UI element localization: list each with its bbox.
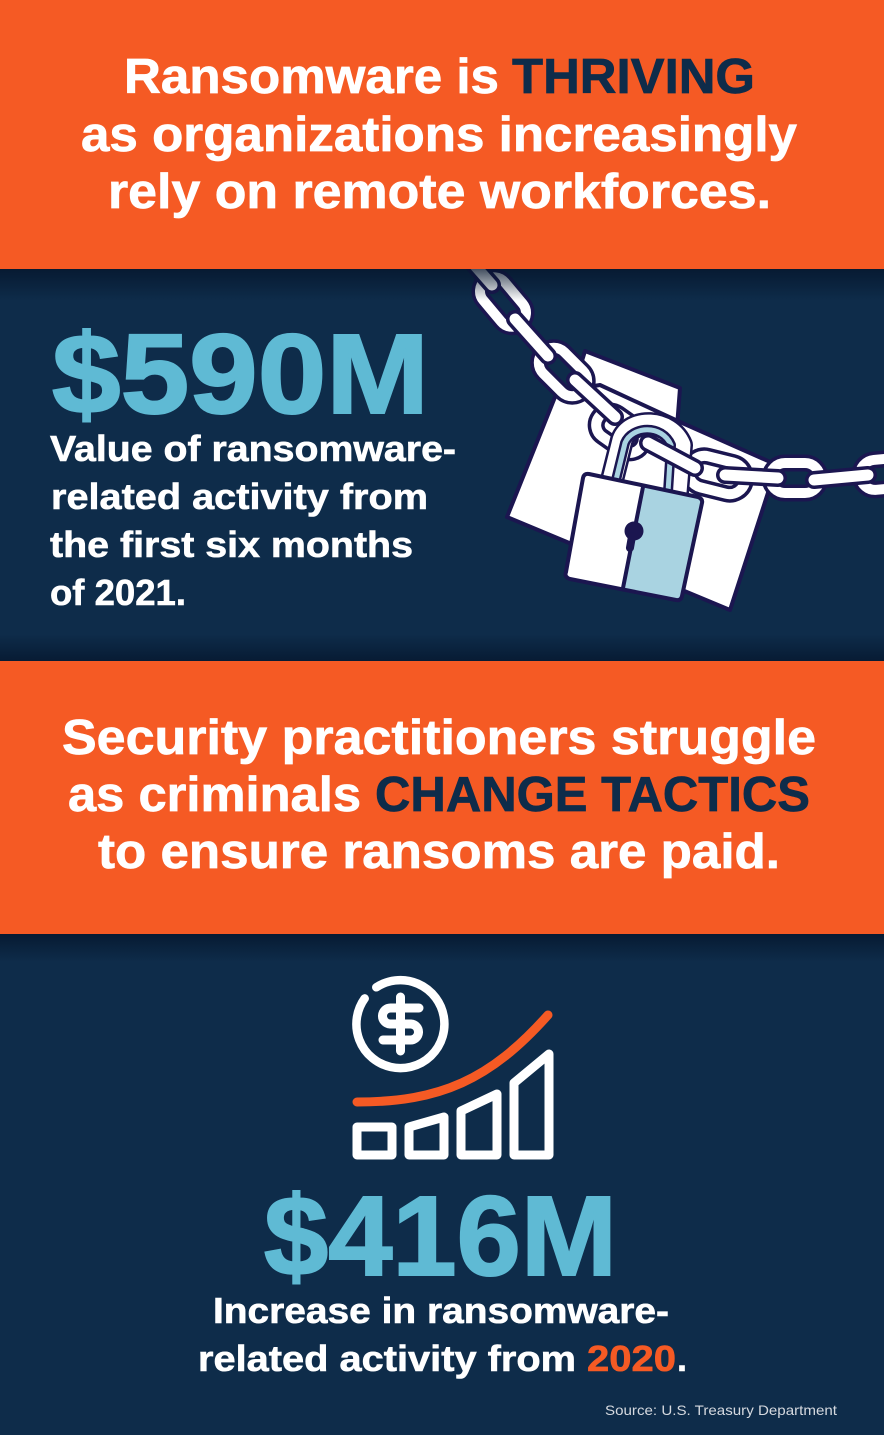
panel: $416M stat [0,934,884,1435]
chain bars [470,260,868,480]
text block: increase from 2020: related activity from [198,1338,576,1379]
text block: value of ransomware activity: of 2021. [50,572,186,613]
bars [357,1054,549,1155]
panel: $590M stat [0,260,884,661]
chain rings [474,272,884,498]
heading: security practitioners struggle: Security practitioners struggle [62,711,816,765]
text block: increase from 2020: . [677,1338,687,1379]
padlock body [565,473,702,600]
heading: security practitioners struggle: CHANGE TACTICS [375,768,810,822]
text block: value of ransomware activity: Value of ransomware- [50,428,456,469]
text block: value of ransomware activity: the first six months [50,524,413,565]
heading: ransomware is thriving: rely on remote workforces. [108,165,771,219]
stat number: $590M: $590M [52,311,429,437]
panel: header banner [0,0,884,269]
icon: dollar coin and rising bar chart [356,980,549,1155]
heading: ransomware is thriving: as organizations increasingly [81,108,797,162]
heading: security practitioners struggle: as criminals [68,768,361,822]
text block: increase from 2020: Increase in ransomware- [213,1290,669,1331]
orange trend line [357,1015,548,1102]
coin ring [356,980,444,1068]
heading: security practitioners struggle: to ensure ransoms are paid. [98,825,780,879]
text block: value of ransomware activity [50,428,456,613]
text block: increase from 2020 [198,1290,687,1379]
source note: Source: U.S. Treasury Department [605,1402,837,1418]
text block: value of ransomware activity: related activity from [51,476,428,517]
heading: ransomware is thriving: THRIVING [512,50,755,104]
keyhole [624,522,644,553]
heading: security practitioners struggle [62,711,816,879]
stat number: $416M: $416M [264,1173,617,1299]
padlock shackle [612,424,681,492]
icon: chained padlock on documents [470,260,884,610]
front document sheet [507,385,777,610]
heading: ransomware is thriving [81,50,797,219]
heading: ransomware is thriving: Ransomware is [124,50,499,104]
panel: change tactics banner [0,661,884,934]
back document sheet [581,349,682,420]
dollar sign [382,997,419,1051]
text block: increase from 2020: 2020 [587,1338,676,1379]
